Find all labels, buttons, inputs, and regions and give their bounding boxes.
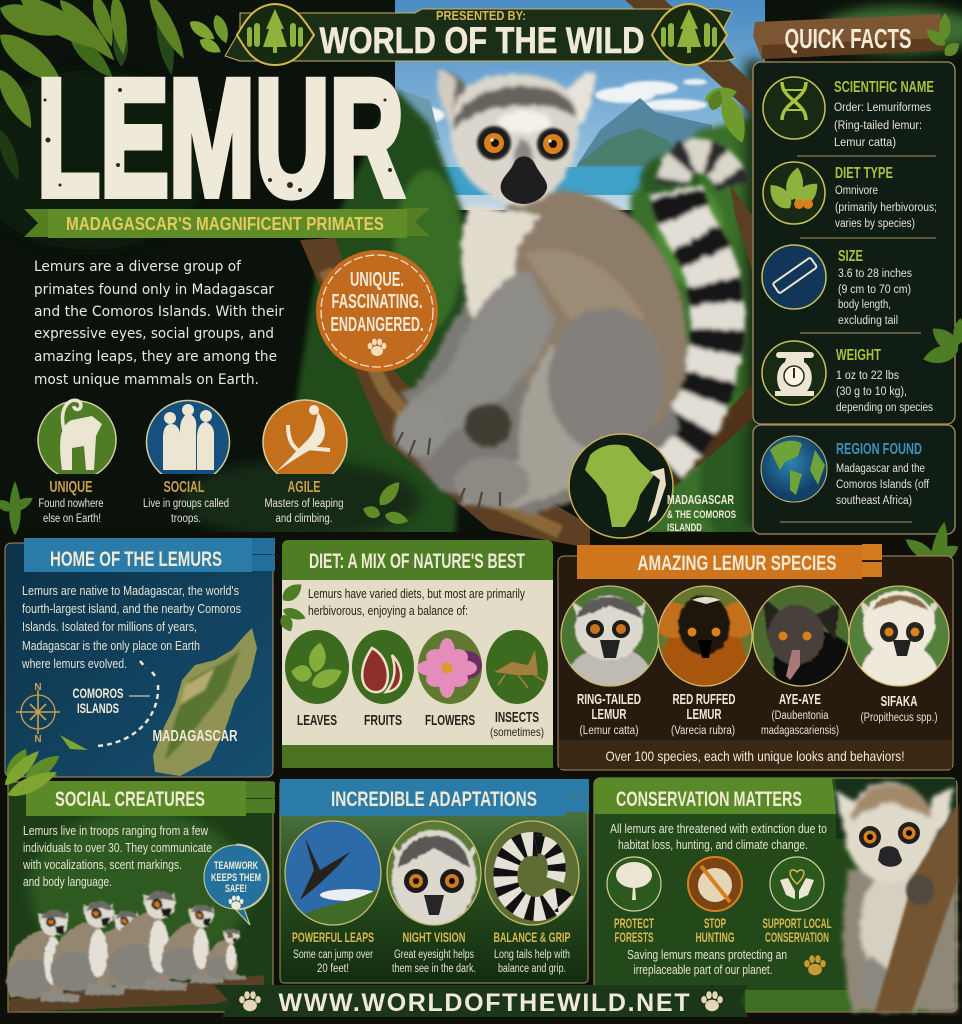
panel: conservation matters — [594, 778, 958, 1012]
map of Madagascar: COMOROS — [72, 685, 124, 701]
powerful leaps — [284, 820, 382, 972]
text — [21, 584, 241, 671]
panel: diet — [278, 540, 553, 768]
brand name: WORLD OF THE WILD — [320, 20, 644, 61]
header: AMAZING LEMUR SPECIES — [638, 552, 836, 575]
leaves — [285, 630, 349, 729]
text: individuals to over 30. They communicate — [23, 841, 212, 855]
main title: LEMUR — [37, 46, 404, 231]
feature: unique: UNIQUE — [50, 479, 93, 496]
paw icon — [804, 955, 826, 975]
diet type: varies by species) — [835, 218, 915, 230]
diet type — [763, 162, 937, 230]
support local conservation — [762, 857, 832, 945]
size: body length, — [838, 299, 891, 311]
insects: (sometimes) — [490, 725, 544, 739]
panel: diet: herbivorous, enjoying a balance of: — [308, 604, 468, 618]
text: with vocalizations, scent markings. — [22, 858, 182, 872]
red ruffed lemur portrait: (Varecia rubra) — [671, 725, 735, 737]
panel: region found — [753, 425, 955, 534]
insects — [486, 630, 548, 739]
panel: region found: southeast Africa) — [836, 495, 912, 507]
intro paragraph: Lemurs are a diverse group of — [34, 259, 242, 275]
feature: agile: and climbing. — [276, 513, 332, 525]
intro paragraph: expressive eyes, social groups, and — [34, 326, 274, 342]
feature: agile: AGILE — [288, 479, 321, 496]
map of Madagascar: N — [34, 734, 42, 745]
stop hunting: STOP — [704, 915, 726, 931]
Africa locator map — [569, 434, 736, 538]
header: CONSERVATION MATTERS — [616, 788, 802, 811]
aye-aye portrait: AYE-AYE — [779, 691, 821, 708]
header banner: World of the Wild — [225, 4, 735, 65]
text: fourth-largest island, and the nearby Comoros — [22, 602, 241, 616]
header — [594, 778, 836, 814]
text: and body language. — [23, 875, 112, 889]
tree branches behind the lemur — [300, 0, 760, 548]
red ruffed lemur portrait: LEMUR — [686, 706, 722, 723]
text — [610, 822, 827, 852]
speech bubble: KEEPS THEM — [211, 872, 261, 884]
scientific name — [763, 77, 934, 149]
insects: INSECTS — [495, 709, 539, 726]
intro paragraph: amazing leaps, they are among the — [34, 349, 277, 365]
text: Madagascar is the only place on Earth — [22, 639, 200, 653]
map of Madagascar: MADAGASCAR — [152, 728, 238, 745]
protect forests — [607, 857, 661, 945]
balance and grip: balance and grip. — [498, 963, 566, 975]
presenter logo right — [652, 4, 727, 65]
scientific name: (Ring-tailed lemur: — [834, 120, 922, 132]
feature: social: Live in groups called — [143, 498, 229, 510]
speech bubble — [204, 844, 269, 925]
speech bubble: TEAMWORK — [214, 860, 258, 872]
text: Islands. Isolated for millions of years, — [22, 620, 197, 634]
support local conservation: CONSERVATION — [765, 929, 829, 945]
small leaves — [0, 478, 410, 535]
palm corner leaf — [0, 746, 60, 802]
panel: quick facts — [753, 62, 955, 424]
header — [577, 544, 882, 579]
presented by: PRESENTED BY: — [436, 8, 526, 23]
map of Madagascar: N — [34, 682, 42, 693]
night vision — [385, 820, 485, 975]
sifaka portrait: SIFAKA — [880, 693, 918, 710]
feature: unique — [38, 400, 116, 525]
map of Madagascar: ISLANDS — [77, 700, 119, 716]
quick facts sign — [753, 13, 962, 59]
palm foliage top left — [0, 0, 232, 183]
weight: 1 oz to 22 lbs — [836, 370, 899, 382]
map of Madagascar — [16, 628, 257, 776]
sifaka portrait — [848, 585, 950, 724]
badge: unique fascinating endangered: FASCINATING. — [332, 291, 422, 313]
side leaves — [902, 318, 962, 576]
intro paragraph: primates found only in Madagascar — [34, 282, 274, 298]
baby lemur on branch — [835, 782, 958, 1012]
text — [22, 824, 212, 889]
palm corner leaves — [6, 749, 60, 777]
panel: region found: REGION FOUND — [836, 441, 922, 458]
aye-aye portrait: madagascariensis) — [761, 725, 839, 737]
panel: region found: Comoros Islands (off — [836, 479, 930, 491]
feature: unique: else on Earth! — [43, 513, 101, 525]
text: Lemurs are native to Madagascar, the world's — [22, 584, 239, 598]
ring-tailed lemur portrait: (Lemur catta) — [580, 725, 639, 737]
balance and grip: Long tails help with — [494, 949, 570, 961]
text: habitat loss, hunting, and climate change. — [618, 838, 808, 852]
aye-aye portrait: (Daubentonia — [772, 710, 829, 722]
footer banner with website: WWW.WORLDOFTHEWILD.NET — [278, 989, 690, 1017]
subtitle ribbon — [24, 208, 430, 238]
header — [24, 538, 275, 572]
size: SIZE — [838, 248, 863, 265]
panel: home of the lemurs — [2, 538, 275, 793]
powerful leaps: 20 feet! — [317, 963, 349, 975]
log — [8, 975, 265, 1012]
diet type: Omnivore — [835, 185, 878, 197]
feature: social — [143, 400, 230, 525]
panel: region found: Madagascar and the — [836, 463, 925, 475]
feature: agile — [263, 400, 347, 525]
Africa locator map: MADAGASCAR — [667, 492, 734, 507]
size: excluding tail — [838, 315, 898, 327]
fruits: FRUITS — [364, 712, 402, 729]
text: Lemurs live in troops ranging from a few — [23, 824, 209, 838]
panel: social creatures — [0, 746, 275, 1012]
speech bubble: SAFE! — [225, 883, 247, 895]
stop hunting: HUNTING — [696, 929, 735, 945]
protect forests: PROTECT — [614, 915, 654, 931]
night vision: Great eyesight helps — [394, 949, 474, 961]
ring-tailed lemur portrait: LEMUR — [592, 706, 627, 723]
stop hunting — [688, 857, 742, 945]
intro paragraph: and the Comoros Islands. With their — [34, 304, 284, 320]
text: All lemurs are threatened with extinction due to — [610, 822, 827, 836]
powerful leaps: POWERFUL LEAPS — [292, 929, 374, 945]
powerful leaps: Some can jump over — [293, 949, 373, 961]
feature: agile: Masters of leaping — [264, 498, 344, 510]
scientific name: Lemur catta) — [834, 137, 896, 149]
red ruffed lemur portrait: RED RUFFED — [672, 691, 736, 708]
footer banner with website — [214, 985, 748, 1017]
fruits — [352, 630, 414, 729]
leaves: LEAVES — [297, 712, 337, 729]
main title — [37, 46, 404, 231]
feature: unique: Found nowhere — [38, 498, 104, 510]
header: HOME OF THE LEMURS — [50, 548, 222, 571]
closing text: Saving lemurs means protecting an — [627, 948, 787, 962]
panel: amazing lemur species — [555, 544, 955, 770]
Africa locator map: & THE COMOROS — [667, 509, 736, 521]
header: INCREDIBLE ADAPTATIONS — [331, 788, 537, 811]
intro paragraph: most unique mammals on Earth. — [34, 372, 259, 388]
night vision: them see in the dark. — [392, 963, 476, 975]
balance and grip — [485, 820, 585, 975]
panel: diet: DIET: A MIX OF NATURE'S BEST — [309, 550, 525, 573]
flowers — [417, 630, 482, 729]
header — [280, 779, 589, 816]
balance and grip: BALANCE & GRIP — [494, 929, 570, 945]
flowers: FLOWERS — [425, 712, 475, 729]
ring-tailed lemur portrait: RING-TAILED — [577, 691, 641, 708]
sifaka portrait: (Propithecus spp.) — [860, 712, 938, 724]
size — [762, 245, 912, 327]
lemur troop — [6, 891, 246, 1002]
weight: WEIGHT — [836, 347, 881, 364]
size: (9 cm to 70 cm) — [838, 284, 911, 296]
size: 3.6 to 28 inches — [838, 268, 912, 280]
main ring-tailed lemur — [393, 70, 733, 515]
species footer: Over 100 species, each with unique looks and behaviors! — [606, 748, 904, 764]
night vision: NIGHT VISION — [402, 929, 466, 945]
subtitle ribbon: MADAGASCAR'S MAGNIFICENT PRIMATES — [66, 214, 384, 234]
badge: unique fascinating endangered — [316, 250, 438, 372]
badge: unique fascinating endangered: ENDANGERED. — [330, 314, 424, 336]
header — [26, 781, 275, 816]
closing text: irreplaceable part of our planet. — [634, 963, 772, 977]
weight — [762, 341, 933, 414]
diet type: DIET TYPE — [835, 165, 893, 182]
badge: unique fascinating endangered: UNIQUE. — [350, 269, 404, 291]
intro paragraph — [34, 259, 284, 388]
diet type: (primarily herbivorous; — [835, 202, 937, 214]
support local conservation: SUPPORT LOCAL — [762, 915, 832, 931]
panel: incredible adaptations — [280, 779, 589, 983]
protect forests: FORESTS — [614, 929, 654, 945]
presenter logo left — [237, 4, 314, 65]
scientific name: Order: Lemuriformes — [834, 102, 931, 114]
closing text — [627, 948, 787, 977]
feature: social: troops. — [171, 513, 201, 525]
aye-aye portrait — [752, 585, 849, 736]
text: where lemurs evolved. — [21, 657, 127, 671]
Africa locator map: ISLANDD — [667, 522, 702, 534]
weight: (30 g to 10 kg), — [836, 386, 907, 398]
ring-tailed lemur portrait — [560, 585, 658, 736]
weight: depending on species — [836, 402, 933, 414]
red ruffed lemur portrait — [654, 580, 756, 737]
feature: social: SOCIAL — [164, 479, 205, 496]
panel: diet: Lemurs have varied diets, but most are primarily — [308, 587, 526, 601]
header: SOCIAL CREATURES — [55, 788, 205, 811]
